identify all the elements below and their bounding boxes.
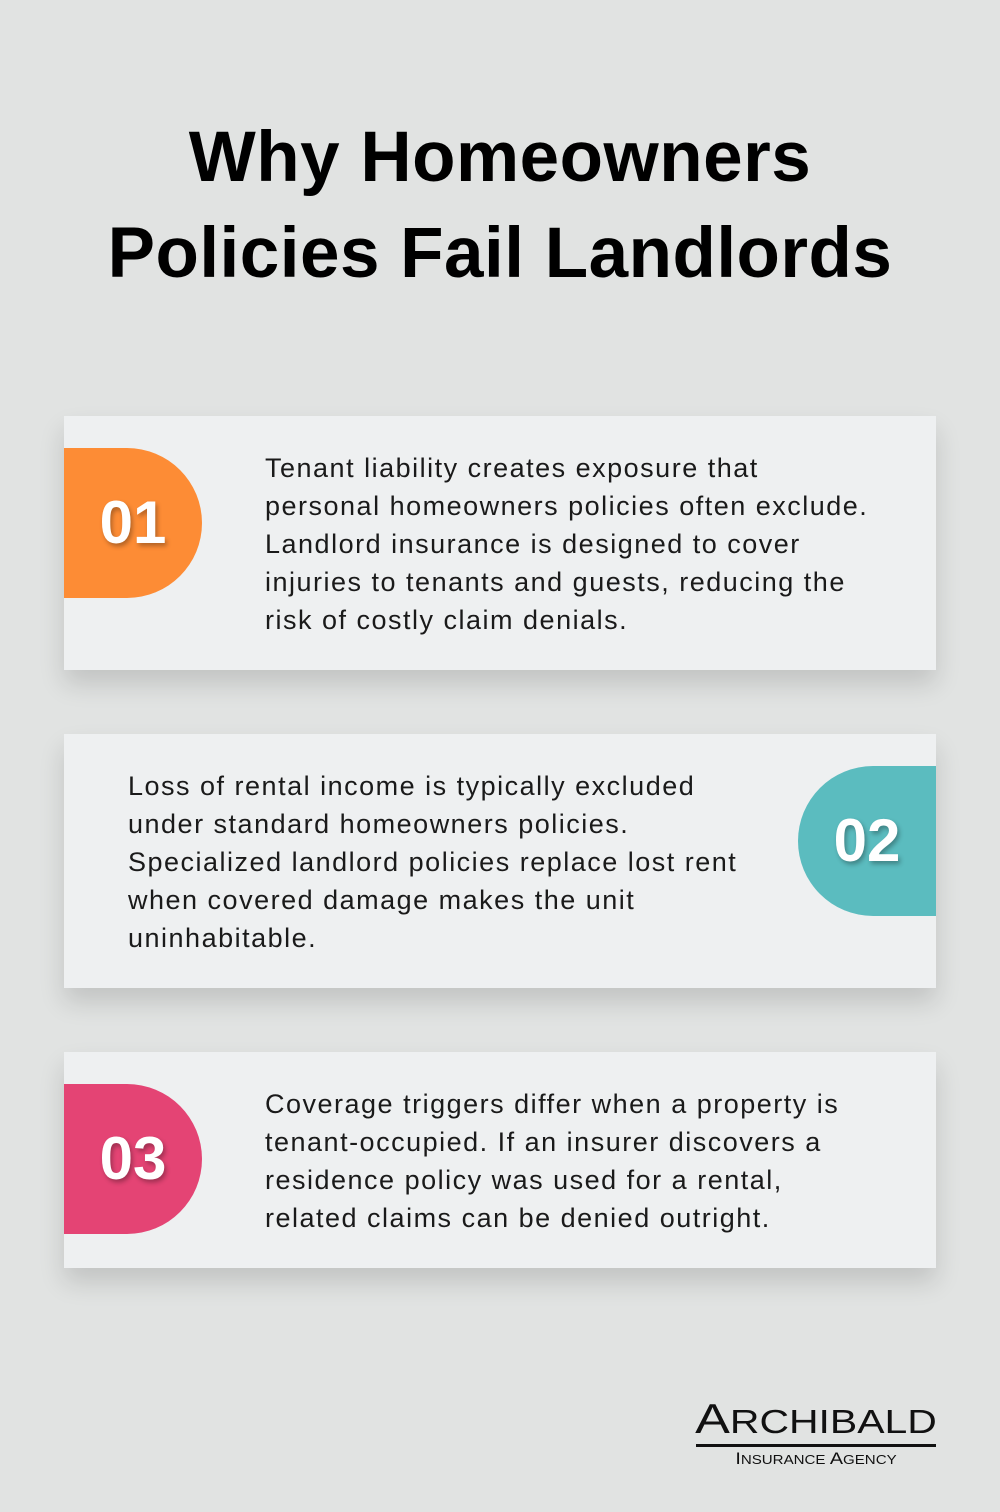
text 3: Coverage triggers differ when a property is — [265, 1089, 839, 1119]
text 3: tenant-occupied. If an insurer discovers a — [265, 1127, 822, 1157]
title: Why Homeowners — [189, 118, 811, 197]
text 1: personal homeowners policies often exclude. — [265, 491, 868, 521]
badge 03: 03 — [100, 1125, 166, 1192]
title: Policies Fail Landlords — [108, 214, 892, 293]
text 2: when covered damage makes the unit — [128, 885, 635, 915]
text 3: residence policy was used for a rental, — [265, 1165, 783, 1195]
panel: card 2 — [64, 734, 936, 988]
text 1: injuries to tenants and guests, reducing the — [265, 567, 846, 597]
title — [108, 118, 892, 293]
text 2: Specialized landlord policies replace lost rent — [128, 847, 737, 877]
badge 02 — [798, 766, 936, 916]
badge 03 — [64, 1084, 202, 1234]
text 1: Tenant liability creates exposure that — [265, 453, 759, 483]
text 1: risk of costly claim denials. — [265, 605, 628, 635]
logo — [695, 1395, 937, 1468]
panel: card 3 — [64, 1052, 936, 1268]
text 2: Loss of rental income is typically excluded — [128, 771, 695, 801]
logo: ARCHIBALD — [695, 1395, 937, 1442]
badge 01: 01 — [100, 489, 166, 556]
text 2 — [128, 771, 737, 953]
text 1: Landlord insurance is designed to cover — [265, 529, 801, 559]
badge 01 — [64, 448, 202, 598]
panel: card 1 — [64, 416, 936, 670]
logo: INSURANCE AGENCY — [735, 1449, 897, 1468]
text 2: under standard homeowners policies. — [128, 809, 629, 839]
text 3: related claims can be denied outright. — [265, 1203, 771, 1233]
badge 02: 02 — [834, 807, 900, 874]
text 1 — [265, 453, 868, 635]
text 3 — [265, 1089, 839, 1233]
text 2: uninhabitable. — [128, 923, 317, 953]
